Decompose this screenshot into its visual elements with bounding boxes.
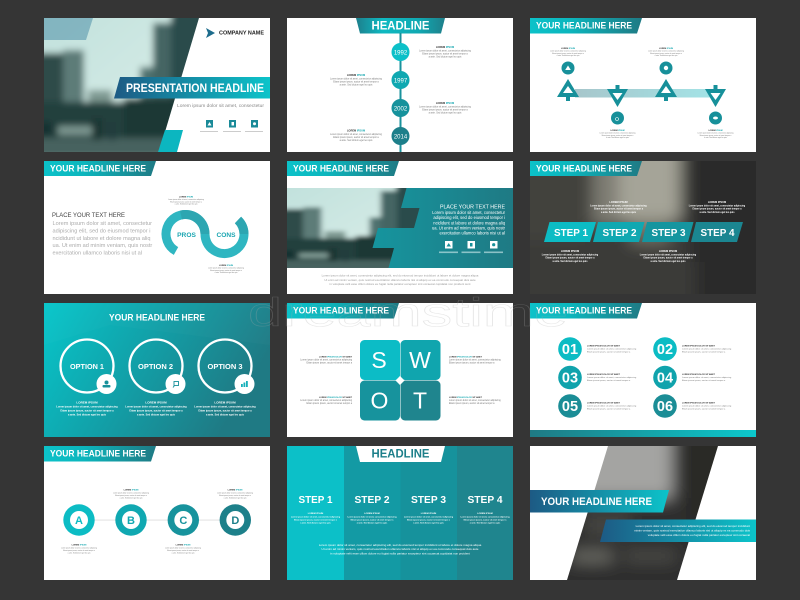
text block step 1: Lorem ipsum dolor sit amet, consectetur adipiscing [542, 253, 599, 256]
text step 1: Lorem ipsum dolor sit amet, consectetur adipiscing [291, 515, 341, 518]
step 4 label: STEP 4 [468, 494, 503, 506]
text step 3: LOREM IPSUM [421, 513, 436, 515]
text step 4: Lorem ipsum dolor sit amet, consectetur adipiscing [460, 515, 510, 518]
text block 1992: a ante. Sed dictum eget leo quis [429, 55, 462, 58]
text block 4: a ante. Sed dictum eget leo quis [704, 136, 727, 139]
T tile [400, 380, 440, 420]
text block C: Etiam ipsum ipsum, auctor sit amet tempor a [167, 549, 199, 552]
S tile [360, 340, 400, 380]
text block A: LOREM IPSUM [72, 544, 86, 546]
column 3 [400, 446, 457, 580]
node A: A [75, 515, 83, 527]
text heading and paragraph: Lorem ipsum dolor sit amet, consectetur [432, 210, 506, 215]
text block bottom: Lorem ipsum dolor sit amet, consectetur adipiscing [208, 267, 244, 270]
node B [115, 504, 147, 536]
text block 3: LOREM IPSUM [659, 48, 673, 50]
item 05: 05 [562, 399, 578, 415]
text block 2002: a ante. Sed dictum eget leo quis [429, 111, 462, 114]
text heading and paragraph: exercitation ullamco laboris nisi ut al [439, 230, 505, 236]
paragraph: ua. Ut enim ad minim veniam, quis nostr [52, 243, 152, 249]
panel: swot [287, 303, 513, 437]
text block S: Lorem ipsum dolor sit amet, consectetur adipiscing [300, 358, 353, 362]
text step 1: Etiam ipsum ipsum, auctor sit amet tempor a [294, 518, 338, 521]
text banner: voluptate velit esse cillum dolore eu fugiat nulla pariatur excepteur sint occaecat [648, 533, 750, 537]
text banner: minim veniam, quis nostrud exercitation ullamco laboris nisi ut aliquip ex ea commodo duis [634, 529, 751, 533]
text step 3: a ante. Sed dictum eget leo quis [413, 521, 445, 524]
cons label: CONS [216, 232, 236, 239]
node A [63, 504, 95, 536]
text block 1: Lorem ipsum dolor sit amet, consectetur adipiscing [550, 50, 586, 53]
headline tab [356, 18, 445, 34]
heading [530, 161, 642, 176]
text block option 3: a ante. Sed dictum eget leo quis [206, 414, 245, 416]
text block A: Lorem ipsum dolor sit amet, consectetur adipiscing [61, 546, 97, 549]
text block D: LOREM IPSUM [228, 490, 242, 492]
text block option 2: LOREM IPSUM [145, 400, 167, 404]
text block bottom: a ante. Sed dictum eget leo quis [215, 271, 238, 274]
text 06: Lorem ipsum dolor sit amet, consectetur adipiscing [682, 404, 732, 408]
item 02 [653, 337, 677, 361]
text 01: Lorem ipsum dolor sit amet, consectetur adipiscing [587, 348, 637, 350]
paragraph: adipiscing elit, sed do eiusmod tempor i [52, 228, 150, 234]
text 05: Etiam ipsum ipsum, auctor sit amet tempor a [587, 407, 631, 410]
text block step 2: LOREM IPSUM [609, 201, 628, 204]
stepped city photo [287, 188, 420, 268]
option 1: OPTION 1 [70, 364, 104, 371]
text heading and paragraph: PLACE YOUR TEXT HERE [440, 204, 505, 210]
O tile [360, 380, 400, 420]
S tile: S [371, 347, 387, 373]
text block 3: Etiam ipsum ipsum, auctor sit amet tempor a [650, 52, 682, 55]
text block 1: LOREM IPSUM [561, 48, 575, 50]
text 01: LOREM IPSUM DOLOR SIT AMET [587, 346, 620, 348]
text block 2014: Etiam ipsum ipsum, auctor sit amet tempor a [333, 136, 379, 139]
panel: closing slide [530, 446, 756, 580]
text block step 1: LOREM IPSUM [561, 250, 579, 253]
text block step 1: Etiam ipsum ipsum, auctor sit amet tempor a [545, 257, 595, 260]
text block 4: Etiam ipsum ipsum, auctor sit amet tempor a [700, 134, 731, 137]
paragraph: exercitation ullamco laboris nisi ut al [52, 251, 142, 257]
item 03: 03 [562, 371, 578, 387]
text block 2014: Lorem ipsum dolor sit amet, consectetur adipiscing [330, 133, 383, 136]
text block step 4: a ante. Sed dictum eget leo quis [700, 211, 735, 214]
step 4: STEP 4 [700, 227, 735, 239]
down arrow 2 [607, 85, 628, 107]
text block 2: LOREM IPSUM [610, 130, 625, 132]
company logo icon [206, 28, 215, 38]
text block D: a ante. Sed dictum eget leo quis [224, 496, 247, 499]
text block step 3: a ante. Sed dictum eget leo quis [651, 260, 686, 263]
infinity ring [166, 214, 244, 254]
year 1997: 1997 [394, 78, 408, 84]
text block 1992: LOREM IPSUM [436, 46, 454, 49]
panel: numbered list [530, 303, 756, 437]
text block 2002: Etiam ipsum ipsum, auctor sit amet tempor a [422, 108, 468, 111]
text heading: PLACE YOUR TEXT HERE [52, 212, 125, 219]
text banner [600, 520, 756, 542]
text 03: Lorem ipsum dolor sit amet, consectetur adipiscing [587, 376, 637, 379]
text block D: Lorem ipsum dolor sit amet, consectetur adipiscing [217, 491, 253, 494]
T tile: T [413, 388, 427, 414]
heading [530, 303, 642, 318]
panel: photo and text [275, 161, 513, 294]
panel: timeline [287, 18, 513, 152]
text block option 2: Etiam ipsum ipsum, auctor sit amet tempor a [129, 410, 183, 412]
text block O: Lorem ipsum dolor sit amet, consectetur adipiscing [300, 399, 353, 402]
teal block [287, 188, 513, 268]
icon circle 3 [660, 62, 672, 74]
text step 4: LOREM IPSUM [477, 513, 493, 515]
heading: YOUR HEADLINE HERE [50, 448, 146, 460]
text block option 3: LOREM IPSUM [214, 400, 236, 404]
text block A: Etiam ipsum ipsum, auctor sit amet tempor a [63, 549, 95, 552]
subtitle: Lorem ipsum dolor sit amet, consectetur [177, 103, 264, 109]
text block top: LOREM IPSUM [179, 196, 193, 198]
icon circle 2 [611, 112, 624, 124]
heading [44, 161, 156, 176]
step 3 label: STEP 3 [411, 494, 446, 506]
text block option 1: Etiam ipsum ipsum, auctor sit amet tempor a [60, 410, 114, 412]
headline tab: HEADLINE [372, 448, 430, 460]
item 05 [558, 394, 582, 418]
text block 1997: a ante. Sed dictum eget leo quis [340, 83, 373, 86]
column 2 [344, 446, 400, 580]
item 01: 01 [562, 342, 578, 358]
text step 1: LOREM IPSUM [308, 513, 323, 515]
text step 2: LOREM IPSUM [364, 513, 380, 515]
panel: arrows timeline [530, 18, 756, 152]
text step 1: a ante. Sed dictum eget leo quis [300, 521, 332, 524]
text block step 2: Lorem ipsum dolor sit amet, consectetur adipiscing [590, 204, 647, 207]
node B: B [127, 515, 135, 527]
heading: YOUR HEADLINE HERE [109, 312, 205, 322]
text block 1997: LOREM IPSUM [347, 74, 365, 77]
text step 3: Lorem ipsum dolor sit amet, consectetur adipiscing [404, 515, 454, 518]
text block 1992: Etiam ipsum ipsum, auctor sit amet tempor a [422, 52, 468, 55]
up arrow 3 [655, 79, 677, 101]
panel: options [44, 303, 270, 437]
text block option 3: Lorem ipsum dolor sit amet, consectetur adipiscing [194, 406, 256, 408]
footer text: Lorem ipsum dolor sit amet, consectetur adipiscing elit, sed do eiusmod tempor incididunt ut labore et dolore magna aliqua [322, 274, 478, 278]
watermark: dreamstime [248, 291, 568, 335]
text step 2: Lorem ipsum dolor sit amet, consectetur adipiscing [347, 515, 397, 518]
text block 4: Lorem ipsum dolor sit amet, consectetur adipiscing [698, 132, 734, 135]
text heading and paragraph: adipiscing elit, sed do eiusmod tempor i [433, 215, 505, 220]
text block A: a ante. Sed dictum eget leo quis [68, 551, 91, 554]
text block step 3: Lorem ipsum dolor sit amet, consectetur adipiscing [640, 253, 697, 256]
text block 2014: LOREM IPSUM [347, 130, 365, 132]
presentation headline banner [114, 77, 270, 98]
text block C: a ante. Sed dictum eget leo quis [172, 551, 195, 554]
W tile [400, 340, 440, 380]
step 3: STEP 3 [652, 227, 686, 239]
paragraph: ncididunt ut labore et dolore magna aliq [52, 236, 150, 242]
text block 3: Lorem ipsum dolor sit amet, consectetur adipiscing [648, 50, 684, 53]
panel: title slide [44, 18, 270, 152]
dark blurred photo [530, 161, 756, 294]
text block 2002: Lorem ipsum dolor sit amet, consectetur adipiscing [419, 105, 472, 108]
text 06: Etiam ipsum ipsum, auctor sit amet tempor a [682, 407, 726, 410]
option 2 [130, 340, 186, 394]
item 06: 06 [657, 399, 673, 415]
text 01: Etiam ipsum ipsum, auctor sit amet tempor a [587, 350, 631, 353]
option 1 [60, 340, 116, 394]
text step 3: Etiam ipsum ipsum, auctor sit amet tempor a [407, 518, 451, 521]
text block step 2: a ante. Sed dictum eget leo quis [601, 211, 637, 214]
option 3: OPTION 3 [208, 364, 243, 371]
text step 4: Etiam ipsum ipsum, auctor sit amet tempor a [464, 518, 507, 521]
panel: ABCD process [44, 446, 270, 580]
text block 2002: LOREM IPSUM [436, 102, 454, 105]
teal corner block [158, 130, 183, 152]
text block T: Etiam ipsum ipsum, auctor sit amet tempor a [449, 402, 495, 405]
translucent corner shape [44, 18, 93, 40]
text block B: a ante. Sed dictum eget leo quis [120, 496, 143, 499]
text block top: a ante. Sed dictum eget leo quis [175, 203, 198, 206]
text block 1: a ante. Sed dictum eget leo quis [557, 54, 580, 57]
heading: YOUR HEADLINE HERE [536, 164, 632, 174]
item 06 [653, 394, 677, 418]
headline tab: HEADLINE [372, 20, 430, 32]
icon circle 4 [709, 112, 722, 124]
timeline axis [400, 33, 402, 152]
item 04 [653, 366, 677, 389]
footer text: Ut enim ad minim veniam, quis nostrud exercitation ullamco laboris nisi ut aliquip ex ea commodo consequat duis aute [324, 278, 476, 282]
year 2014: 2014 [394, 134, 408, 140]
heading: YOUR HEADLINE HERE [293, 164, 389, 174]
step 1 label: STEP 1 [298, 494, 333, 506]
heading: YOUR HEADLINE HERE [293, 306, 389, 316]
text block option 1: a ante. Sed dictum eget leo quis [68, 414, 107, 416]
footer text: in voluptate velit esse cillum dolore eu fugiat nulla pariatur excepteur sint occaecat cupidatat non proident [330, 551, 470, 555]
text block 2014: a ante. Sed dictum eget leo quis [340, 139, 373, 142]
item 03 [558, 366, 582, 389]
year 1997 [392, 71, 410, 89]
footer text: in voluptate velit esse cillum dolore eu fugiat nulla pariatur excepteur sint occaecat cupidatat non proident sunt [330, 282, 471, 286]
text block S: LOREM IPSUM DOLOR SIT AMET [319, 356, 352, 358]
heading [44, 446, 156, 462]
text block 1997: Etiam ipsum ipsum, auctor sit amet tempor a [333, 80, 379, 83]
item 04: 04 [657, 371, 673, 387]
connecting band [575, 89, 712, 98]
text block W: LOREM IPSUM DOLOR SIT AMET [449, 356, 482, 358]
text block step 4: Etiam ipsum ipsum, auctor sit amet tempor a [692, 208, 742, 211]
down arrow 4 [705, 85, 726, 107]
node D: D [231, 515, 239, 527]
text block 2: Etiam ipsum ipsum, auctor sit amet tempor a [602, 134, 633, 137]
text block step 2: Etiam ipsum ipsum, auctor sit amet tempor a [594, 208, 644, 211]
headline tab [356, 446, 445, 462]
text heading and paragraph: ua. Ut enim ad minim veniam, quis nostr [432, 225, 506, 230]
icon row [439, 241, 503, 253]
footer text: Lorem ipsum dolor sit amet, consectetur adipiscing elit, sed do eiusmod tempor incididunt ut labore et dolore magna aliqua [319, 543, 481, 547]
text block D: Etiam ipsum ipsum, auctor sit amet tempor a [219, 494, 251, 497]
text block 1997: Lorem ipsum dolor sit amet, consectetur adipiscing [330, 77, 383, 80]
text 03: LOREM IPSUM DOLOR SIT AMET [587, 374, 620, 376]
panel: pros and cons [44, 161, 270, 294]
text block T: Lorem ipsum dolor sit amet, consectetur adipiscing [449, 399, 501, 402]
text block S: Etiam ipsum ipsum, auctor sit amet tempor a [307, 361, 353, 364]
step 2: STEP 2 [602, 227, 637, 239]
text block step 3: Etiam ipsum ipsum, auctor sit amet tempor a [643, 257, 693, 260]
heading: YOUR HEADLINE HERE [536, 306, 632, 316]
option 2: OPTION 2 [138, 364, 173, 371]
heading: YOUR HEADLINE HERE [536, 21, 632, 32]
heading: YOUR HEADLINE HERE [50, 164, 146, 174]
centre diamond [396, 376, 404, 385]
headline banner: YOUR HEADLINE HERE [541, 496, 652, 508]
headline banner [530, 490, 669, 512]
text 03: Etiam ipsum ipsum, auctor sit amet tempor a [587, 379, 631, 382]
text block C: LOREM IPSUM [176, 544, 190, 546]
step 1: STEP 1 [554, 227, 588, 239]
text block option 3: Etiam ipsum ipsum, auctor sit amet tempor a [198, 410, 252, 412]
text 04: LOREM IPSUM DOLOR SIT AMET [682, 374, 715, 376]
text block 1992: Lorem ipsum dolor sit amet, consectetur adipiscing [419, 49, 472, 52]
text block 2: a ante. Sed dictum eget leo quis [606, 136, 629, 139]
node C: C [179, 515, 187, 527]
heading [287, 161, 399, 176]
text banner: Lorem ipsum dolor sit amet, consectetur adipiscing elit, sed do eiusmod tempor incididunt [636, 524, 750, 528]
icon circle 1 [562, 62, 574, 74]
paragraph: Lorem ipsum dolor sit amet, consectetur [52, 221, 152, 227]
text block option 1: LOREM IPSUM [76, 400, 98, 404]
column 4 [457, 446, 513, 580]
up arrow 1 [557, 79, 579, 101]
text block B: Lorem ipsum dolor sit amet, consectetur adipiscing [113, 491, 149, 494]
company name: COMPANY NAME [219, 30, 265, 36]
node C [168, 504, 199, 536]
text block 1: Etiam ipsum ipsum, auctor sit amet tempor a [552, 52, 584, 55]
step 2 [593, 222, 644, 242]
panel: steps on dark photo [530, 161, 756, 294]
text 05: LOREM IPSUM DOLOR SIT AMET [587, 402, 620, 404]
text block option 1: Lorem ipsum dolor sit amet, consectetur adipiscing [56, 406, 118, 408]
text block B: Etiam ipsum ipsum, auctor sit amet tempor a [115, 494, 147, 497]
text block 2: Lorem ipsum dolor sit amet, consectetur adipiscing [600, 132, 636, 135]
heading [287, 303, 399, 318]
text block option 2: a ante. Sed dictum eget leo quis [137, 414, 176, 416]
item 01 [558, 337, 582, 361]
year 1992: 1992 [394, 50, 408, 56]
heading [530, 18, 642, 34]
text 06: LOREM IPSUM DOLOR SIT AMET [682, 402, 715, 404]
text heading and paragraph: ncididunt ut labore et dolore magna aliq [433, 220, 506, 225]
connector line [79, 520, 235, 521]
slanted photo [567, 446, 718, 580]
option 3 [198, 340, 254, 394]
text block step 4: Lorem ipsum dolor sit amet, consectetur adipiscing [689, 204, 746, 207]
text step 2: a ante. Sed dictum eget leo quis [357, 521, 388, 524]
text block T: LOREM IPSUM DOLOR SIT AMET [449, 397, 482, 399]
text block step 4: LOREM IPSUM [708, 201, 726, 204]
pros label: PROS [177, 232, 196, 239]
text 02: LOREM IPSUM DOLOR SIT AMET [682, 346, 715, 348]
item 02: 02 [657, 342, 673, 358]
year 2002: 2002 [394, 106, 408, 112]
text 04: Lorem ipsum dolor sit amet, consectetur adipiscing [682, 376, 732, 379]
step 2 label: STEP 2 [354, 494, 390, 506]
year 1992 [392, 43, 410, 61]
text step 4: a ante. Sed dictum eget leo quis [470, 521, 501, 524]
text block B: LOREM IPSUM [124, 490, 138, 492]
O tile: O [371, 388, 388, 414]
footer bar [530, 430, 756, 437]
text block 4: LOREM IPSUM [708, 130, 723, 132]
node D [220, 504, 251, 536]
text 02: Lorem ipsum dolor sit amet, consectetur adipiscing [682, 348, 732, 350]
text block top: Etiam ipsum ipsum, auctor sit amet tempor a [170, 200, 202, 203]
text block W: Etiam ipsum ipsum, auctor sit amet tempor a [449, 361, 495, 364]
blurred city photo [44, 18, 199, 152]
W tile: W [409, 347, 431, 373]
text step 2: Etiam ipsum ipsum, auctor sit amet tempor a [351, 518, 394, 521]
text block option 2: Lorem ipsum dolor sit amet, consectetur adipiscing [125, 406, 187, 408]
text 02: Etiam ipsum ipsum, auctor sit amet tempor a [682, 350, 726, 353]
text block O: LOREM IPSUM DOLOR SIT AMET [319, 397, 352, 399]
text block 3: a ante. Sed dictum eget leo quis [655, 54, 678, 57]
text block O: Etiam ipsum ipsum, auctor sit amet tempor a [307, 402, 353, 405]
text 04: Etiam ipsum ipsum, auctor sit amet tempor a [682, 379, 726, 382]
text 05: Lorem ipsum dolor sit amet, consectetur adipiscing [587, 404, 637, 408]
text block C: Lorem ipsum dolor sit amet, consectetur adipiscing [165, 546, 201, 549]
icon row [200, 120, 263, 132]
text block top: Lorem ipsum dolor sit amet, consectetur adipiscing [168, 198, 204, 201]
step 1 [544, 222, 596, 242]
step 3 [642, 222, 694, 242]
column 1 [287, 446, 344, 580]
text block step 1: a ante. Sed dictum eget leo quis [553, 260, 588, 263]
footer text: Ut enim ad minim veniam, quis nostrud exercitation ullamco laboris nisi ut aliquip ex ea commodo consequat duis aute [322, 547, 479, 551]
presentation headline banner: PRESENTATION HEADLINE [126, 83, 264, 95]
step 4 [691, 222, 743, 242]
text block bottom: LOREM IPSUM [219, 265, 233, 267]
year 2002 [392, 99, 410, 117]
text block W: Lorem ipsum dolor sit amet, consectetur adipiscing [449, 358, 501, 362]
year 2014 [392, 127, 410, 145]
text block bottom: Etiam ipsum ipsum, auctor sit amet tempor a [210, 269, 242, 272]
panel: four column steps [287, 446, 513, 580]
text block step 3: LOREM IPSUM [659, 250, 677, 253]
